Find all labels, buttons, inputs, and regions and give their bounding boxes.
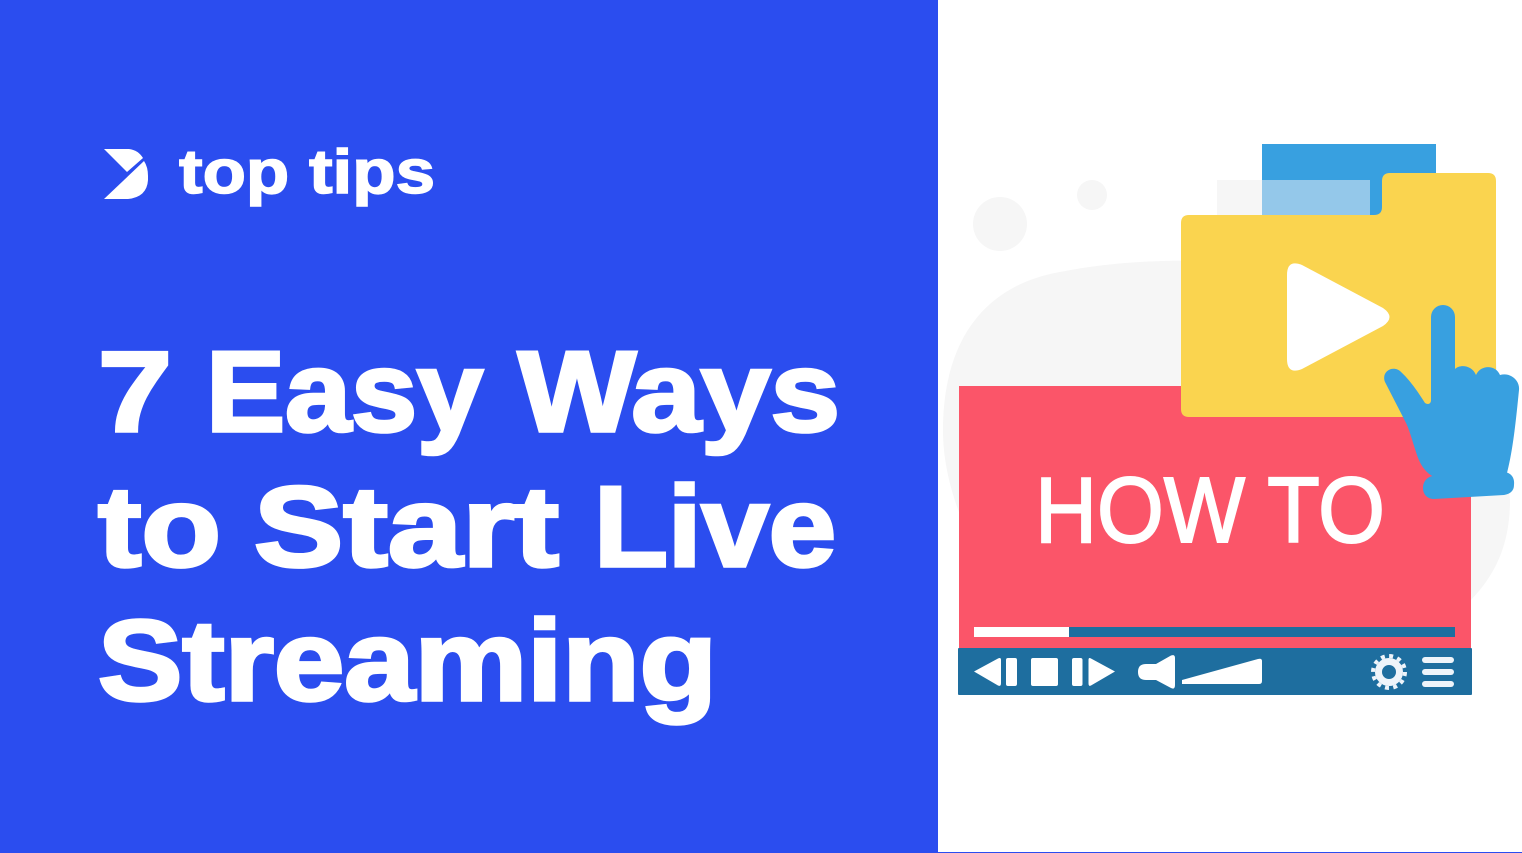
- title: Start: [254, 464, 559, 591]
- how to heading: HOW TO: [1035, 458, 1385, 562]
- title: Live: [594, 464, 836, 591]
- icon: forward: [1072, 658, 1115, 686]
- panel: blue title background: [0, 0, 938, 853]
- icon: stop: [1031, 658, 1058, 686]
- icon: rewind: [974, 658, 1017, 686]
- logo: top tips: [104, 138, 435, 207]
- title: Ways: [518, 329, 840, 456]
- icon: speaker: [1138, 655, 1175, 689]
- brand name: top tips: [179, 138, 435, 207]
- title: to: [98, 464, 221, 591]
- background blob: [943, 261, 1510, 600]
- folder: [1181, 173, 1496, 417]
- title: Easy: [206, 329, 483, 456]
- player controls: [958, 648, 1472, 695]
- decorative circles: [973, 180, 1107, 251]
- icon: pointing hand: [1384, 305, 1519, 499]
- title: Streaming: [98, 598, 717, 725]
- icon: menu: [1422, 657, 1454, 687]
- icon: gear: [1373, 656, 1405, 688]
- title: [98, 329, 840, 725]
- icon: play triangle: [1287, 263, 1390, 371]
- video window: [959, 386, 1471, 648]
- icon: volume slider: [1182, 659, 1262, 684]
- progress bar: [974, 627, 1455, 637]
- icon: logo mark: [104, 149, 148, 199]
- back document: [1217, 144, 1436, 216]
- title: 7: [98, 329, 172, 456]
- illustration: how-to video player: [943, 144, 1519, 695]
